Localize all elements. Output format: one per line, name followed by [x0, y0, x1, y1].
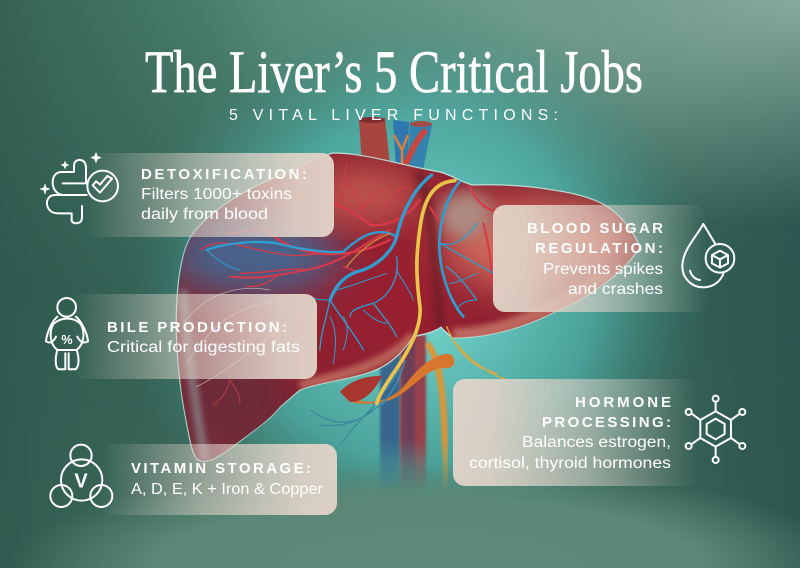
liver body — [176, 153, 640, 461]
text: vitamin storage — [131, 460, 323, 498]
text: blood sugar regulation: REGULATION: — [535, 240, 663, 257]
text: blood sugar regulation: and crashes — [568, 281, 663, 298]
yellow bile duct — [377, 181, 455, 403]
text: blood sugar regulation: BLOOD SUGAR — [527, 220, 663, 237]
text: bile production — [107, 319, 300, 356]
text: bile production: Critical for digesting fats — [107, 339, 300, 356]
text: hormone processing: cortisol, thyroid hormones — [469, 455, 671, 472]
text: bile production: BILE PRODUCTION: — [107, 319, 287, 336]
text: vitamin storage: VITAMIN STORAGE: — [131, 460, 311, 477]
red arteries — [200, 163, 500, 287]
text: detoxification: Filters 1000+ toxins — [141, 186, 292, 203]
text: blood sugar regulation: Prevents spikes — [543, 261, 663, 278]
blue veins — [207, 175, 493, 363]
icon: vitamin circles — [50, 445, 112, 507]
icon: blood drop with cube — [682, 224, 734, 287]
text: hormone processing — [469, 394, 671, 472]
panel: blood sugar regulation — [493, 205, 734, 312]
panel: hormone processing — [453, 379, 745, 486]
icon: vitamin circles: V — [74, 470, 88, 492]
icon: molecule — [686, 396, 745, 463]
liver illustration — [170, 117, 640, 510]
title: The Liver’s 5 Critical Jobs — [145, 39, 643, 105]
gallbladder and fine vessels — [310, 354, 454, 445]
liver shading — [170, 167, 640, 460]
text: detoxification — [141, 166, 307, 223]
text: blood sugar regulation — [527, 220, 663, 298]
icon: person: % — [61, 333, 73, 347]
text: vitamin storage: A, D, E, K + Iron & Copper — [131, 481, 323, 498]
icon: person — [46, 298, 88, 369]
subtitle: 5 VITAL LIVER FUNCTIONS: — [229, 107, 558, 124]
icon: intestine with check — [40, 153, 118, 223]
panel: vitamin storage — [50, 444, 337, 515]
upper blood vessels — [359, 117, 432, 170]
text: hormone processing: HORMONE — [575, 394, 671, 411]
text: detoxification: daily from blood — [141, 206, 268, 223]
text: detoxification: DETOXIFICATION: — [141, 166, 307, 183]
text: hormone processing: Balances estrogen, — [522, 434, 671, 451]
panel: detoxification — [40, 153, 334, 237]
lower lobe fine veins — [213, 380, 240, 405]
lower vessels — [378, 334, 448, 488]
text: hormone processing: PROCESSING: — [542, 414, 671, 431]
liver veins — [183, 163, 507, 405]
panel: bile production — [46, 294, 317, 379]
